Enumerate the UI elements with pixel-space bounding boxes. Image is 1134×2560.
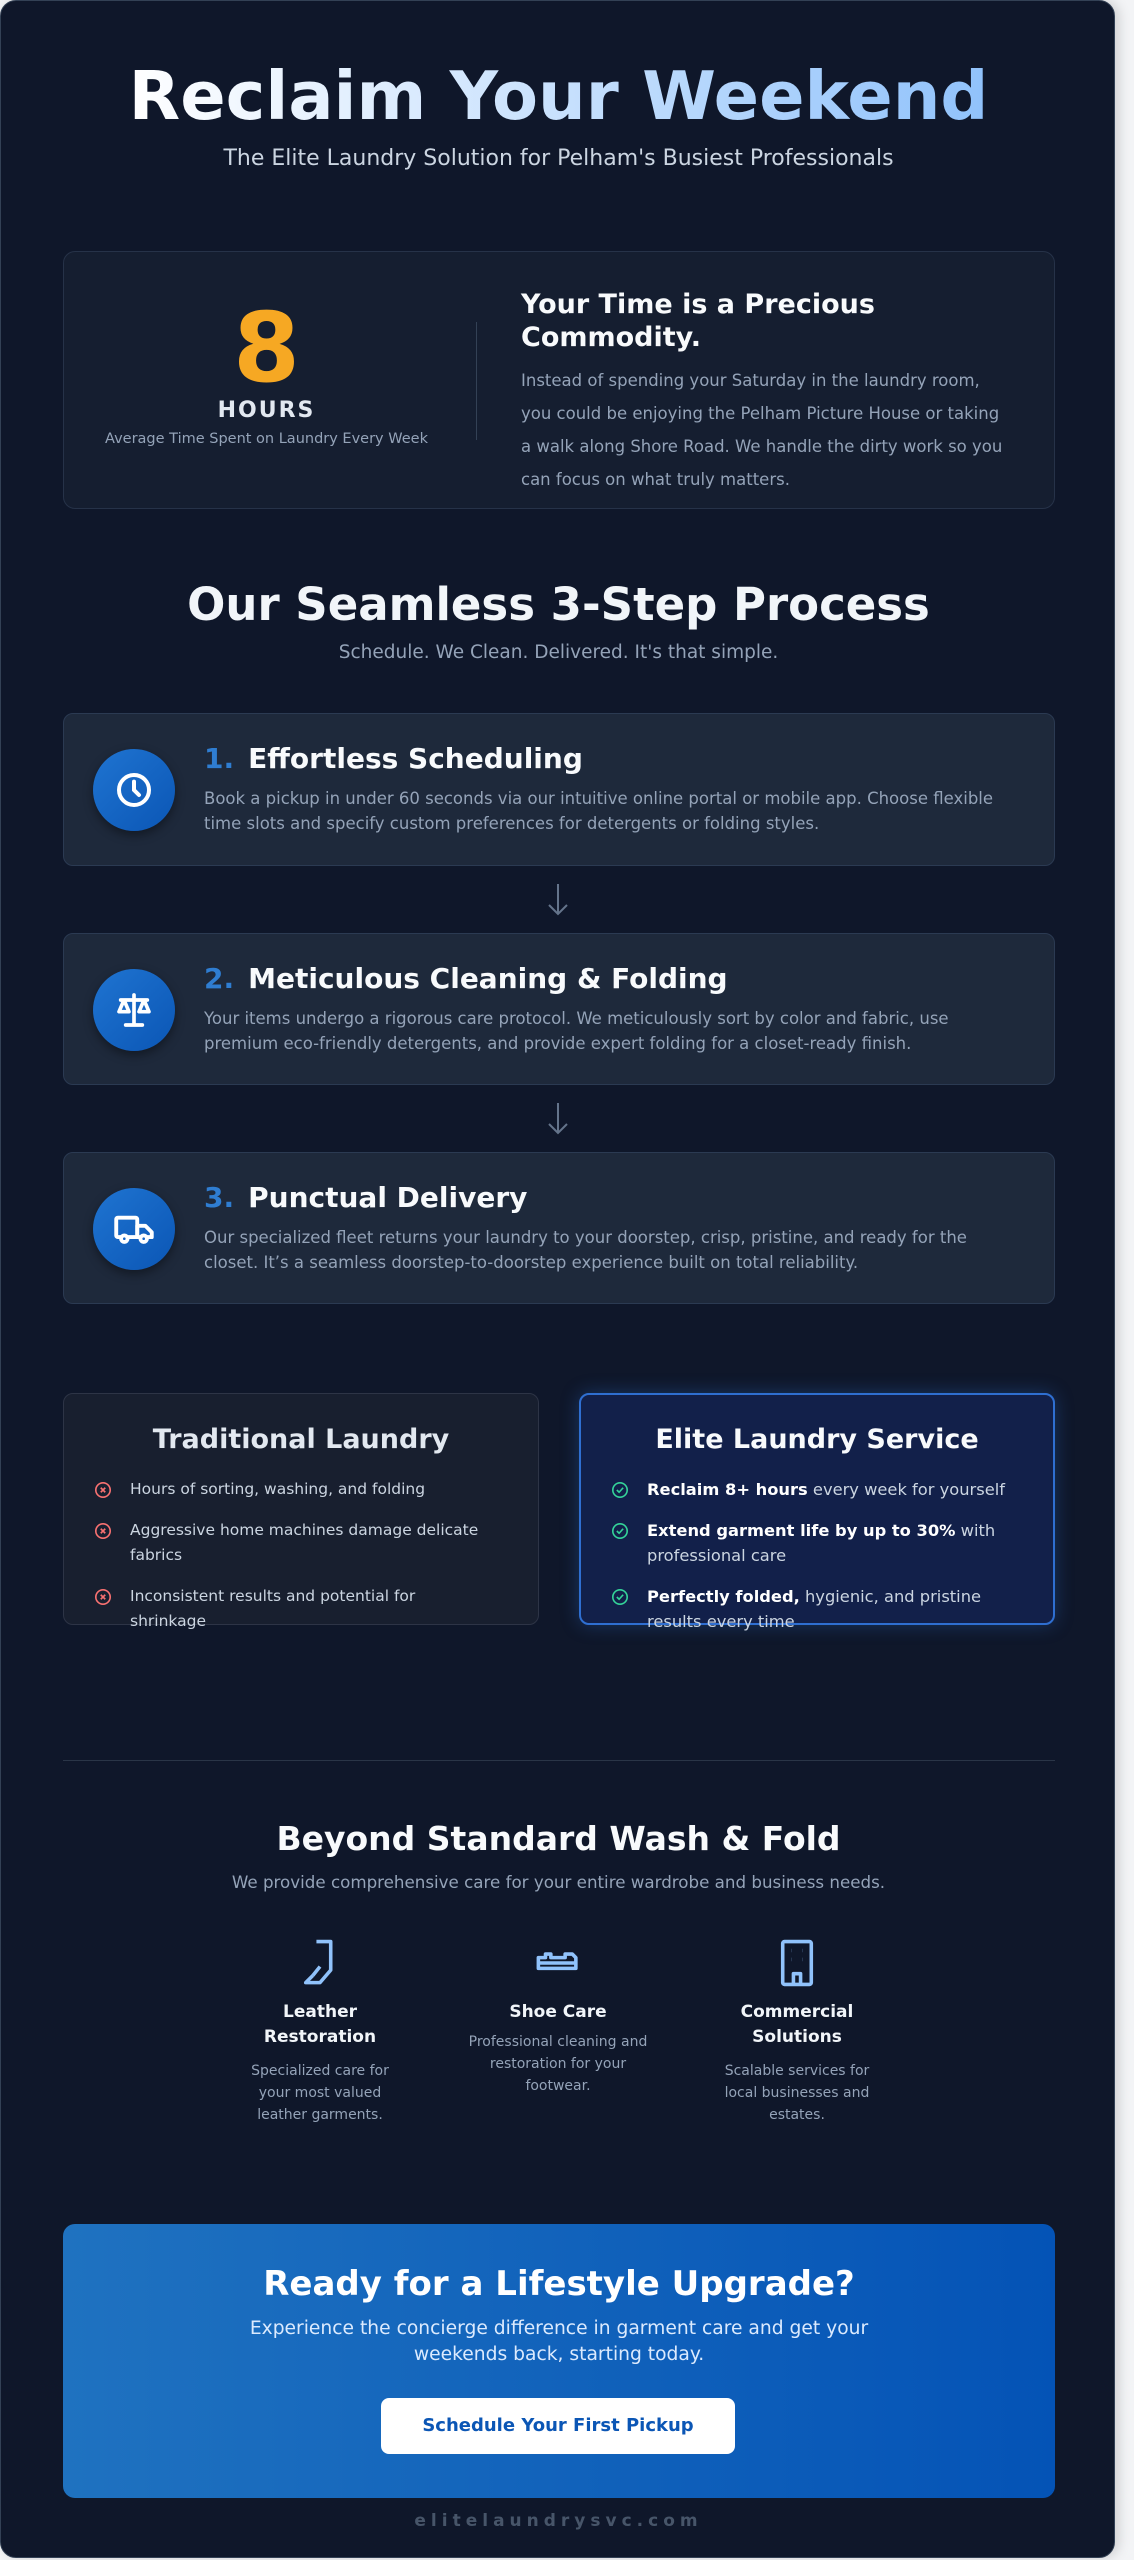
stat: 8 hours: Average Time Spent on Laundry Every Week — [105, 431, 428, 447]
panel: elite service: Reclaim 8+ hours every week for yourself — [647, 1480, 1005, 1499]
text: precious commodity: Your Time is a Precious Commodity. — [521, 289, 875, 353]
panel: elite service: Elite Laundry Service — [655, 1424, 979, 1455]
step 3 — [63, 1152, 1055, 1304]
subheading: beyond: We provide comprehensive care for your entire wardrobe and business needs. — [232, 1872, 885, 1892]
service: leather — [251, 1940, 389, 2123]
panel: traditional laundry: Inconsistent results and potential for — [130, 1587, 415, 1605]
panel: elite service: professional care — [647, 1546, 786, 1565]
stat: 8 hours: HOURS — [218, 398, 315, 423]
panel: elite service: Perfectly folded, hygienic, and pristine — [647, 1587, 981, 1606]
step 3: Our specialized fleet returns your laundry to your doorstep, crisp, pristine, and ready for the closet. It’s a seamless doorstep-to-doorstep experience built on total reliability. — [204, 1228, 967, 1272]
service: commercial: Scalable services for local businesses and estates. — [725, 2063, 869, 2123]
icon: truck — [93, 1188, 175, 1270]
service: shoe — [469, 1952, 647, 2094]
subheading: process: Schedule. We Clean. Delivered. It's that simple. — [339, 642, 778, 663]
service: leather: Restoration — [264, 2027, 376, 2047]
button: Schedule Your First Pickup — [422, 2415, 694, 2436]
panel: elite service — [579, 1393, 1055, 1625]
panel: call to action: Ready for a Lifestyle Upgrade? — [263, 2264, 855, 2304]
panel: traditional laundry: Aggressive home machines damage delicate — [130, 1521, 478, 1539]
service: commercial: Solutions — [752, 2027, 842, 2047]
step 3: 3. Punctual Delivery — [204, 1181, 527, 1214]
service: commercial: Commercial — [741, 2002, 853, 2022]
service: shoe: Shoe Care — [509, 2002, 607, 2022]
panel: traditional laundry — [63, 1393, 539, 1625]
heading: beyond: Beyond Standard Wash & Fold — [276, 1819, 841, 1858]
panel: traditional laundry: shrinkage — [130, 1612, 206, 1630]
step 2: 2. Meticulous Cleaning & Folding — [204, 962, 728, 995]
service: leather: Leather — [283, 2002, 357, 2022]
panel: traditional laundry: Hours of sorting, washing, and folding — [130, 1480, 425, 1498]
service: leather: Specialized care for your most valued leather garments. — [251, 2063, 389, 2123]
stat: 8 hours — [105, 292, 428, 447]
panel: elite service: results every time — [647, 1612, 795, 1631]
arrow — [548, 884, 568, 916]
stat: 8 hours: 8 — [233, 292, 300, 404]
icon: clock — [93, 749, 175, 831]
title: Reclaim Your Weekend — [129, 57, 988, 135]
panel: elite service: Extend garment life by up to 30% with — [647, 1521, 995, 1540]
icon: shoe — [536, 1952, 578, 1970]
heading: process: Our Seamless 3-Step Process — [187, 578, 930, 631]
footer: elitelaundrysvc.com — [414, 2511, 703, 2531]
step 2 — [63, 933, 1055, 1085]
panel: traditional laundry: fabrics — [130, 1546, 182, 1564]
service: commercial — [725, 1940, 870, 2123]
icon: building — [780, 1940, 814, 1986]
step 1: Book a pickup in under 60 seconds via our intuitive online portal or mobile app. Choose flexible time slots and specify custom preferences for detergents or folding styles. — [204, 789, 993, 833]
panel: call to action: Experience the concierge difference in garment care and get your weekends back, starting today. — [250, 2318, 868, 2365]
service: shoe: Professional cleaning and restoration for your footwear. — [469, 2034, 647, 2094]
arrow — [548, 1103, 568, 1134]
text: precious commodity — [520, 289, 1002, 489]
subtitle: The Elite Laundry Solution for Pelham's Busiest Professionals — [223, 146, 894, 171]
step 1 — [63, 713, 1055, 866]
panel: traditional laundry: Traditional Laundry — [153, 1424, 449, 1455]
text: precious commodity: Instead of spending your Saturday in the laundry room, you could be enjoying the Pelham Picture House or taking a walk along Shore Road. We handle the dirty work so you can focus on what truly matters. — [521, 371, 1002, 489]
button — [381, 2398, 735, 2454]
panel: call to action — [63, 2224, 1055, 2498]
step 1: 1. Effortless Scheduling — [204, 742, 583, 775]
panel: stat card — [63, 251, 1055, 509]
step 2: Your items undergo a rigorous care protocol. We meticulously sort by color and fabric, use premium eco-friendly detergents, and provide expert folding for a closet-ready finish. — [204, 1009, 949, 1053]
icon: scales — [93, 969, 175, 1051]
icon: leather — [304, 1940, 332, 1984]
